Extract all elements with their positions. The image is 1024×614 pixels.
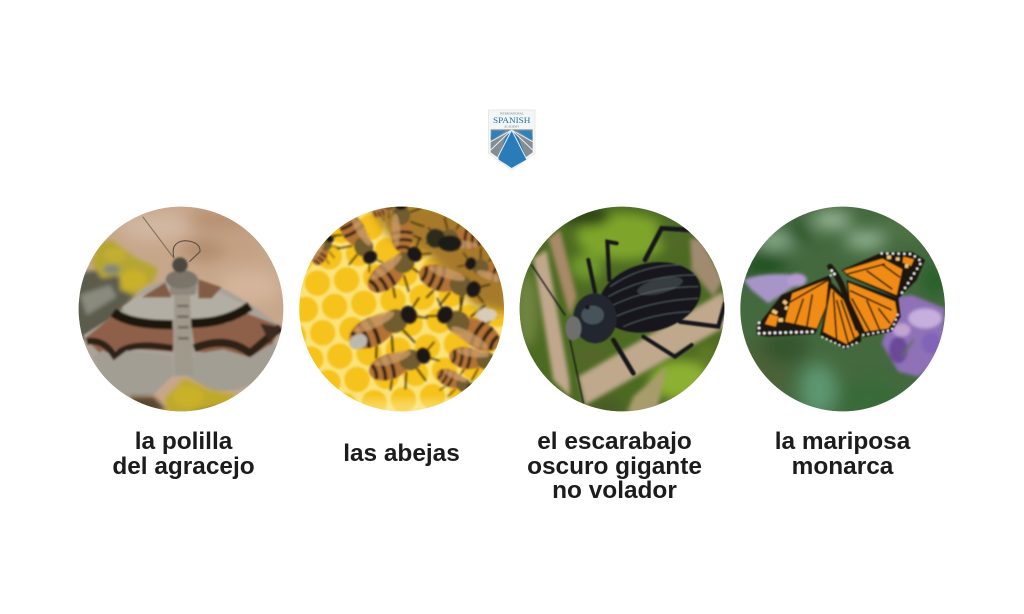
label: el escarabajo oscuro gigante no volador: el escarabajo — [537, 428, 692, 455]
photo: giant dark beetle — [520, 206, 724, 412]
label: la polilla del agracejo: del agracejo — [112, 452, 255, 480]
photo: monarch butterfly — [740, 206, 945, 412]
logo: Spanish academy shield: ACADEMY — [504, 124, 520, 128]
logo: Spanish academy shield: INTERNATIONAL — [500, 111, 524, 115]
label: el escarabajo oscuro gigante no volador — [527, 428, 702, 504]
label: las abejas: las abejas — [343, 440, 460, 467]
label: la mariposa monarca: la mariposa — [775, 428, 910, 455]
label: el escarabajo oscuro gigante no volador: no volador — [552, 477, 677, 504]
logo: Spanish academy shield: SPANISH — [493, 115, 530, 125]
label: la polilla del agracejo — [112, 428, 255, 480]
photo: moth — [78, 206, 284, 412]
label: la mariposa monarca: monarca — [792, 452, 893, 480]
label: el escarabajo oscuro gigante no volador: oscuro gigante — [527, 452, 702, 480]
label: la mariposa monarca — [775, 428, 910, 480]
photo: honey bees — [299, 206, 504, 412]
label: la polilla del agracejo: la polilla — [135, 428, 232, 455]
logo: Spanish academy shield — [488, 110, 536, 170]
